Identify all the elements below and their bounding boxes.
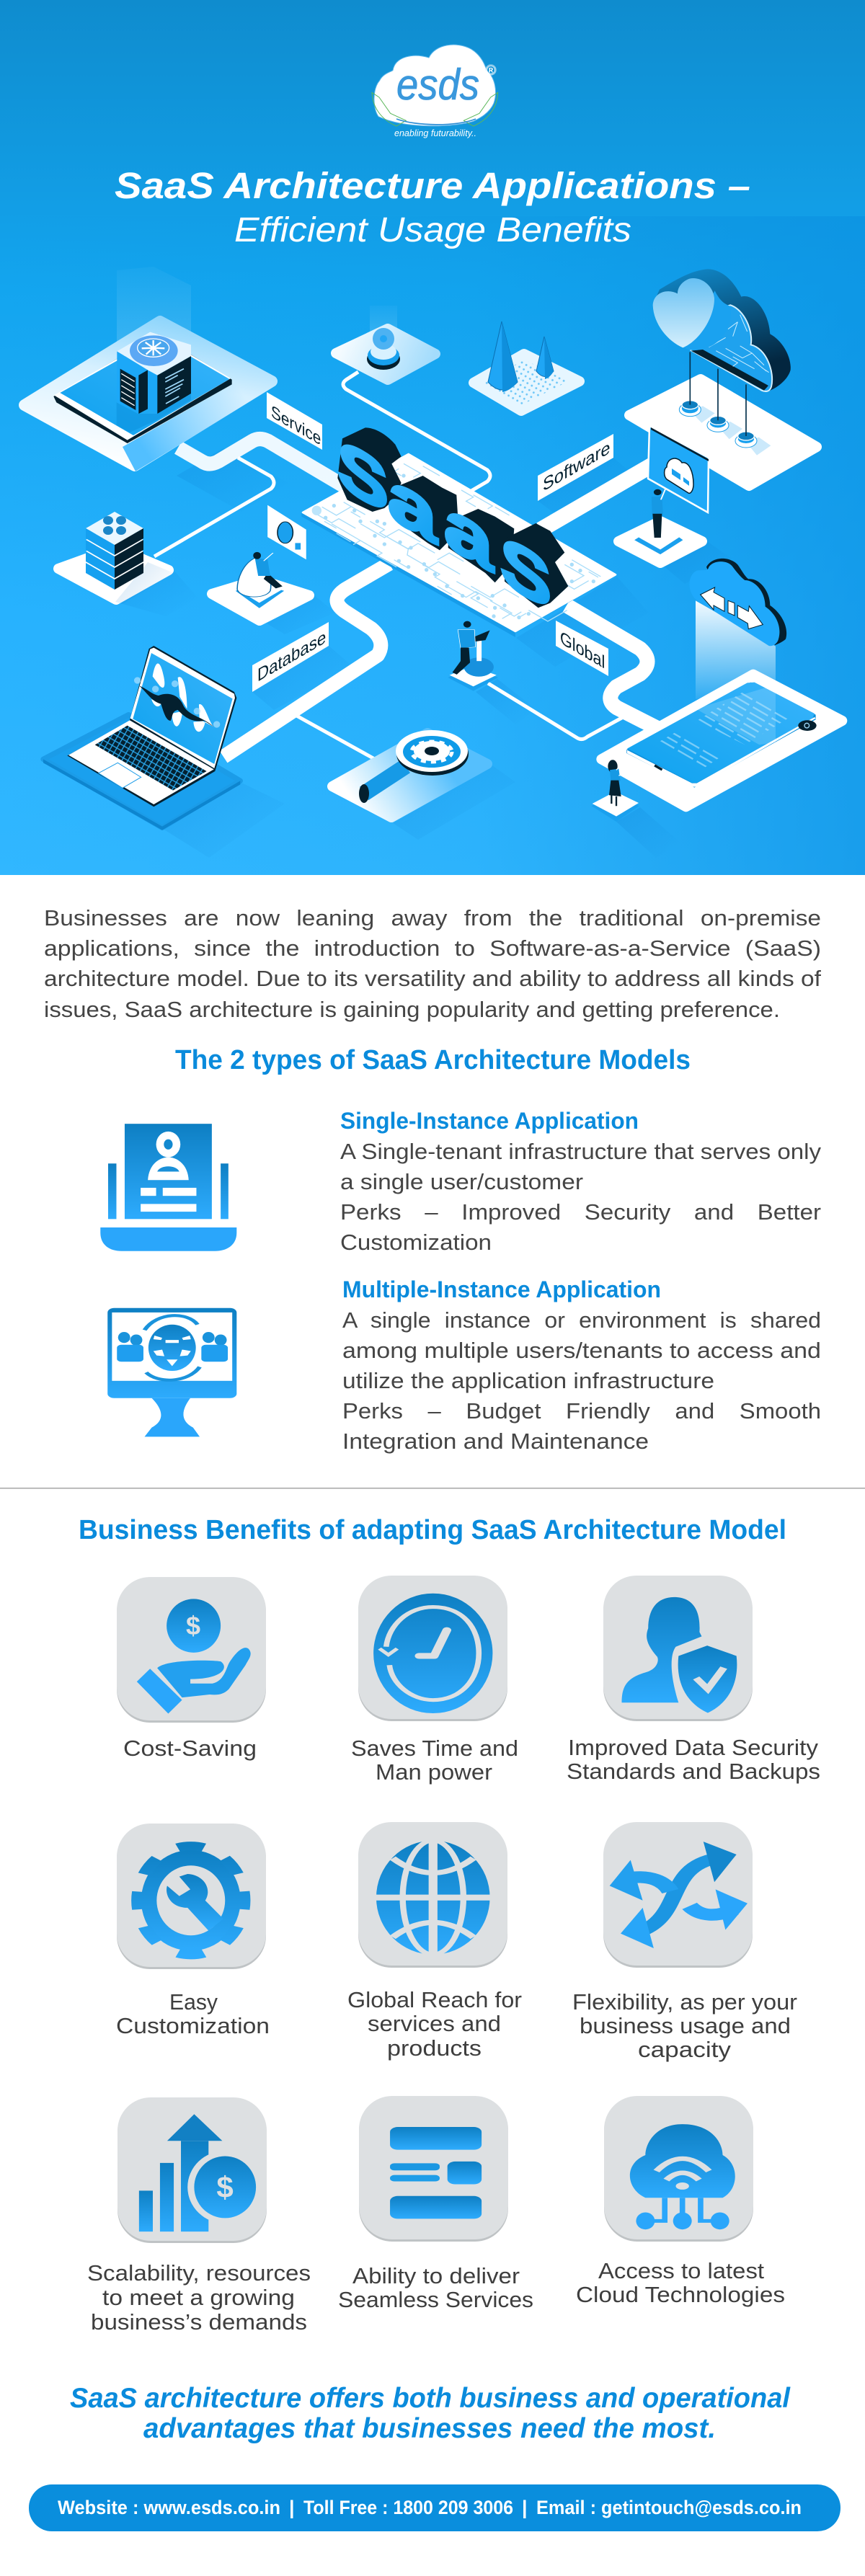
title: Efficient Usage Benefits bbox=[234, 211, 631, 249]
benefit: seamless services: Ability to deliver bbox=[352, 2263, 520, 2288]
heading: business benefits: Business Benefits of adapting SaaS Architecture Model bbox=[79, 1515, 786, 1545]
closing statement bbox=[70, 2383, 791, 2444]
logo: esds cloud bbox=[372, 45, 498, 138]
benefit: easy customization: Customization bbox=[116, 2013, 270, 2038]
figure: person in egg chair with chart card bbox=[212, 505, 309, 621]
benefit: cloud technologies: Access to latest bbox=[598, 2258, 764, 2283]
figure: man at cloud screen bbox=[618, 426, 709, 563]
platform with circuit and SaaS letters bbox=[301, 424, 616, 637]
footer contact pill: Toll Free : 1800 209 3006 bbox=[303, 2497, 513, 2518]
benefit: easy customization: Easy bbox=[169, 1989, 218, 2015]
label: Software: Software bbox=[543, 437, 611, 496]
soft shadows under plates bbox=[115, 448, 732, 858]
heading: 2 types: The 2 types of SaaS Architecture Models bbox=[175, 1045, 691, 1075]
plate: tablet document bbox=[601, 675, 842, 807]
benefit: cost-saving: $ bbox=[186, 1611, 200, 1640]
benefit: improved data security bbox=[567, 1576, 820, 1784]
benefit: global reach bbox=[347, 1822, 522, 2061]
plate: top right white bbox=[629, 379, 817, 486]
benefit: saves time bbox=[351, 1576, 518, 1785]
icon: laptop with waveform bbox=[43, 646, 240, 830]
benefit: saves time: Man power bbox=[376, 1759, 492, 1785]
benefit: scalability: to meet a growing bbox=[102, 2285, 295, 2310]
icon: heart-shaped data cloud with wires bbox=[653, 269, 791, 456]
intro paragraph: applications, since the introduction to Software-as-a-Service (SaaS) bbox=[44, 936, 821, 961]
benefit: flexibility: capacity bbox=[638, 2037, 732, 2062]
benefit: global reach: Global Reach for bbox=[347, 1987, 522, 2012]
figure: woman on small base bbox=[592, 760, 639, 822]
text: multiple-instance application: utilize the application infrastructure bbox=[342, 1368, 714, 1393]
intro paragraph bbox=[44, 905, 821, 1022]
footer contact pill: | bbox=[522, 2497, 528, 2518]
benefit: cost-saving bbox=[117, 1577, 266, 1761]
platform with circuit and SaaS letters: a bbox=[444, 480, 494, 588]
text: multiple-instance application: Integration and Maintenance bbox=[342, 1429, 649, 1454]
isometric SaaS illustration bbox=[25, 267, 842, 858]
benefit: scalability: Scalability, resources bbox=[87, 2260, 311, 2286]
white connector roads bbox=[154, 372, 660, 761]
icon: tablet with server tower bbox=[53, 332, 232, 443]
label: Global: Global bbox=[560, 627, 605, 673]
icon: multiple-instance application bbox=[107, 1308, 236, 1436]
benefit: global reach: services and bbox=[368, 2011, 501, 2036]
plate: server tablet bbox=[25, 267, 277, 471]
intro paragraph: Businesses are now leaning away from the traditional on-premise bbox=[44, 905, 821, 931]
benefit: improved data security: Improved Data Security bbox=[568, 1735, 819, 1760]
icon: single-instance application bbox=[100, 1124, 236, 1251]
text: single-instance application: A Single-tenant infrastructure that serves only bbox=[340, 1139, 822, 1164]
benefit: scalability: business’s demands bbox=[91, 2309, 307, 2335]
footer contact pill bbox=[29, 2484, 840, 2531]
icon: transfer cloud with light beam bbox=[689, 559, 786, 699]
benefit: scalability: $ bbox=[216, 2170, 234, 2204]
benefit: cost-saving: Cost-Saving bbox=[123, 1736, 257, 1761]
platform with circuit and SaaS letters: S bbox=[500, 520, 551, 625]
logo: esds cloud: enabling futurability.. bbox=[394, 128, 476, 138]
label: Database: Database bbox=[257, 626, 326, 686]
title: SaaS Architecture Applications – bbox=[115, 165, 750, 206]
closing statement: advantages that businesses need the most. bbox=[143, 2413, 716, 2444]
footer contact pill: Email : getintouch@esds.co.in bbox=[536, 2497, 802, 2518]
plate and icon: magnifier with gear bbox=[332, 730, 487, 817]
text: multiple-instance application: A single instance or environment is shared bbox=[342, 1307, 821, 1333]
benefit: seamless services bbox=[338, 2096, 533, 2312]
footer contact pill: Website : www.esds.co.in bbox=[58, 2497, 280, 2518]
benefit: flexibility: Flexibility, as per your bbox=[572, 1989, 797, 2015]
benefit: global reach: products bbox=[387, 2035, 482, 2061]
benefit: flexibility bbox=[572, 1822, 797, 2062]
text: multiple-instance application: Perks – Budget Friendly and Smooth bbox=[342, 1398, 821, 1424]
benefit: seamless services: Seamless Services bbox=[338, 2287, 533, 2312]
label: Software bbox=[538, 434, 613, 501]
text: multiple-instance application: among multiple users/tenants to access and bbox=[342, 1338, 821, 1363]
text: single-instance application bbox=[340, 1108, 822, 1255]
intro paragraph: architecture model. Due to its versatility and ability to address all kinds of bbox=[44, 966, 821, 991]
figure: man with gear pedestal bbox=[448, 621, 498, 691]
benefit: scalability bbox=[87, 2097, 311, 2335]
text: single-instance application: Customization bbox=[340, 1230, 492, 1255]
benefit: improved data security: Standards and Backups bbox=[567, 1759, 820, 1784]
benefit: cloud technologies bbox=[576, 2096, 785, 2307]
benefit: easy customization bbox=[116, 1824, 270, 2038]
plate: dotted with cones bbox=[474, 321, 580, 411]
plate: small gear diamond bbox=[336, 306, 435, 380]
title bbox=[115, 165, 750, 249]
text: single-instance application: Single-Instance Application bbox=[340, 1108, 639, 1134]
label: Service: Service bbox=[271, 401, 321, 450]
platform with circuit and SaaS letters: S bbox=[337, 424, 389, 528]
text: multiple-instance application: Multiple-Instance Application bbox=[342, 1276, 661, 1302]
intro paragraph: issues, SaaS architecture is gaining popularity and getting preference. bbox=[44, 997, 780, 1022]
benefit: flexibility: business usage and bbox=[580, 2013, 791, 2038]
hero background bbox=[0, 0, 865, 875]
platform with circuit and SaaS letters: a bbox=[388, 452, 438, 560]
text: multiple-instance application bbox=[342, 1276, 821, 1454]
text: single-instance application: Perks – Improved Security and Better bbox=[340, 1199, 821, 1225]
closing statement: SaaS architecture offers both business and operational bbox=[70, 2383, 791, 2414]
logo: esds cloud: esds bbox=[396, 61, 479, 109]
footer contact pill: | bbox=[289, 2497, 295, 2518]
logo: esds cloud: ® bbox=[487, 63, 496, 77]
benefit: cloud technologies: Cloud Technologies bbox=[576, 2282, 785, 2307]
icon: server stack on plate bbox=[58, 512, 174, 604]
benefit: saves time: Saves Time and bbox=[351, 1736, 518, 1761]
text: single-instance application: a single user/customer bbox=[340, 1169, 583, 1194]
